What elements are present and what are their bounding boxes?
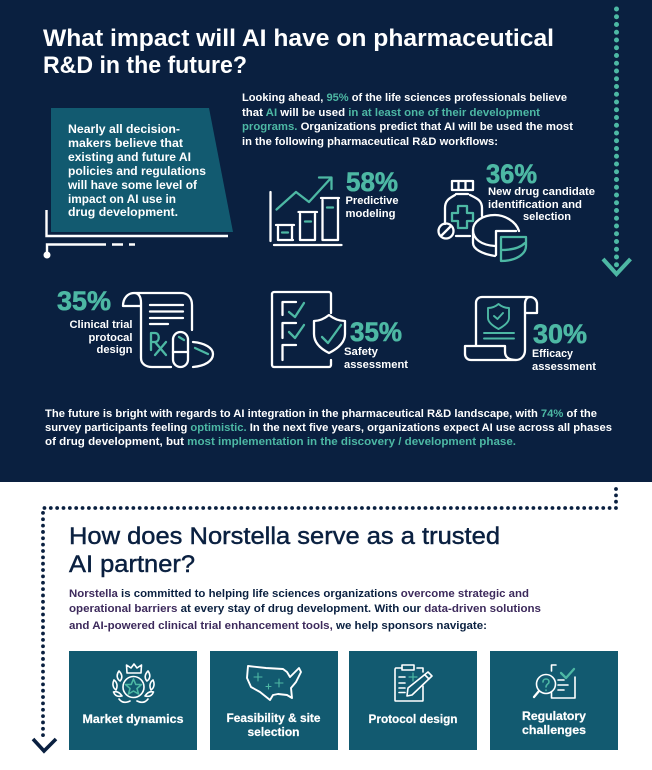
callout: decision-makers [51,108,233,232]
stat: clinical trial protocol design: design [96,344,133,356]
icon: medicine bottle and pills [438,181,526,261]
heading: trusted partner [69,523,500,578]
text block: intro: programs. Organizations predict that AI will be used the most [242,121,573,133]
stat: efficacy assessment: assessment [532,361,596,373]
stat: efficacy assessment [465,297,596,373]
stat: predictive modeling [270,167,398,245]
text block: outlook: of drug development, but most implementation in the discovery / development phase. [45,436,516,448]
stat: efficacy assessment: Efficacy [532,348,574,360]
icon: checklist and shield [272,292,345,367]
stat: safety assessment: 35% [350,317,402,347]
stat: efficacy assessment: 30% [533,319,587,349]
stat: safety assessment: Safety [344,346,379,358]
callout: decision-makers: impact on AI use in [68,194,176,206]
text block: outlook [45,408,612,448]
arrow: teal dotted down arrow [603,9,630,274]
stat: new drug candidate: identification and [488,199,582,211]
heading: trusted partner: How does Norstella serve as a trusted [69,523,500,550]
callout: decision-makers: Nearly all decision- [68,124,180,136]
text block: intro [242,92,573,148]
text block: outlook: The future is bright with regards to AI integration in the pharmaceutical R&D landscape, with 74% of the [45,408,597,420]
callout: decision-makers: policies and regulations [68,166,206,178]
icon: clipboard with pencil [395,665,432,701]
callout: decision-makers: makers believe that [68,138,183,150]
icon: magnifying glass and checklist [534,665,575,698]
card: feasibility and site selection: Feasibility & site [226,711,321,725]
callout: decision-makers: drug development. [68,207,178,219]
text block: Norstella commitment: operational barriers at every stay of drug development. With our data-driven solutions [69,603,541,615]
text block: intro: Looking ahead, 95% of the life sciences professionals believe [242,92,567,104]
text block: Norstella commitment: and AI-powered clinical trial enhancement tools, we help sponsors navigate: [69,620,487,632]
text block: intro: that AI will be used in at least one of their development [242,107,540,119]
stat: clinical trial protocol design: Clinical trial [70,319,132,331]
title [43,25,554,79]
title: What impact will AI have on pharmaceutical [43,25,554,52]
stat: predictive modeling: 58% [346,167,398,197]
icon: bar chart with rising arrow [270,178,342,245]
stat: new drug candidate: selection [523,211,571,223]
text block: intro: in the following pharmaceutical R&D workflows: [242,136,498,148]
card: protocol design: Protocol design [368,712,458,726]
card: feasibility and site selection [210,651,338,750]
text block: Norstella commitment [69,588,541,632]
stat: safety assessment: assessment [344,359,408,371]
card: feasibility and site selection: selection [248,725,300,739]
card: market dynamics: Market dynamics [82,712,184,726]
panel: dark upper section [0,0,652,482]
stat: clinical trial protocol design [57,286,213,367]
icon: laurel crest with star [113,664,154,702]
callout: decision-makers: will have some level of [67,180,197,192]
heading: trusted partner: AI partner? [69,551,195,578]
text block: Norstella commitment: Norstella is committed to helping life sciences organizations overcome strategic and [69,588,529,600]
stat: clinical trial protocol design: protocal [88,332,132,344]
stat: clinical trial protocol design: 35% [57,286,111,316]
arrow: navy dotted connector [33,489,616,751]
stat: predictive modeling: Predictive [346,195,398,207]
card: regulatory challenges [490,651,618,750]
icon: US map [247,666,301,700]
stat: predictive modeling: modeling [346,208,396,220]
icon: prescription scroll and pills [123,293,213,367]
stat: new drug candidate [438,159,595,261]
callout connector lines [44,210,228,258]
card: regulatory challenges: Regulatory [522,709,586,723]
icon: certificate scroll with shield [465,297,537,360]
callout: decision-makers: existing and future AI [68,152,191,164]
stat: new drug candidate: New drug candidate [488,186,595,198]
card: market dynamics [69,651,197,750]
title: R&D in the future? [43,52,247,79]
stat: safety assessment [272,292,408,371]
card: regulatory challenges: challenges [522,723,586,737]
stat: new drug candidate: 36% [486,159,537,189]
card: protocol design [349,651,477,750]
text block: outlook: survey participants feeling optimistic. In the next five years, organizations expect AI use across all phases [45,422,612,434]
